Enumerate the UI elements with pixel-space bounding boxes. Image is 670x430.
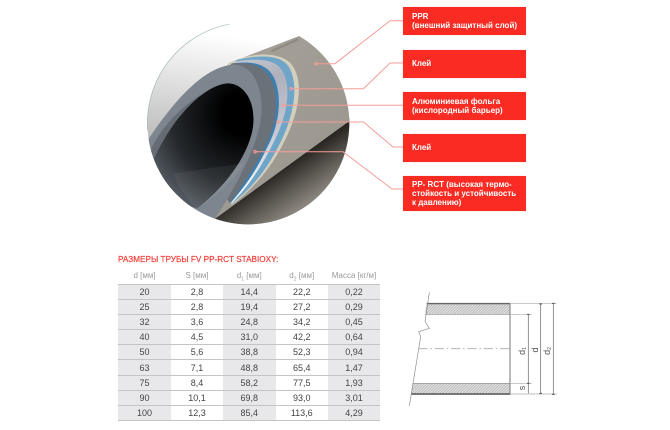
inner face shade (148, 95, 200, 160)
label: aluminium foil (403, 92, 526, 120)
inner bore (150, 83, 253, 208)
label: PP-RCT: PP- RCT (высокая термо- (412, 180, 512, 188)
dimensions table: 50 (139, 347, 150, 357)
dimensions table: 65,4 (293, 363, 311, 373)
dimensions table: 0,29 (345, 302, 363, 312)
dimensions table: 38,8 (240, 347, 258, 357)
dimensions table: 69,8 (240, 393, 258, 403)
label: aluminium foil: Алюминиевая фольга (412, 96, 500, 106)
dimensions table: 12,3 (188, 408, 206, 418)
dimensions table: 27,2 (293, 302, 311, 312)
dimensions table: 8,4 (191, 378, 203, 388)
dimensions table: 5,6 (191, 347, 203, 357)
dimensions table: 3,01 (345, 393, 363, 403)
dimensions table: 0,22 (345, 287, 363, 297)
dimensions table: 1,93 (345, 378, 363, 388)
dimensions table: 24,8 (240, 317, 258, 327)
label: PPR (403, 7, 526, 35)
dimensions table: 48,8 (240, 363, 258, 373)
dimension labels: d (517, 350, 527, 355)
dimensions table: 52,3 (293, 347, 311, 357)
label: PPR: (внешний защитный слой) (412, 21, 517, 30)
pipe cutaway illustration (146, 20, 403, 224)
label: PP-RCT: к давлению) (412, 198, 461, 206)
dimension labels: 1 (522, 347, 528, 350)
dimensions table: 31,0 (240, 332, 258, 342)
dimensions table: 90 (139, 393, 150, 403)
dimensions table: 19,4 (240, 302, 258, 312)
dimensions table: 1,47 (345, 363, 363, 373)
dimensions table: 93,0 (293, 393, 311, 403)
dimensions table: 3,6 (191, 317, 203, 327)
label: PP-RCT (403, 176, 526, 210)
dimension labels: 2 (547, 347, 553, 350)
label: glue 1 (403, 50, 526, 78)
dimensions table: 0,45 (345, 317, 363, 327)
dimensions table (118, 270, 380, 421)
dimension labels: d (530, 347, 540, 353)
table title: РАЗМЕРЫ ТРУБЫ FV PP-RCT STABIOXY: (118, 255, 278, 264)
dimensions table: 4,29 (345, 408, 363, 418)
leader: glue 2 (277, 121, 403, 147)
layer: aluminium foil (230, 60, 288, 204)
dimensions table: d2 [мм] (289, 270, 314, 282)
label: glue 1: Клей (412, 59, 431, 68)
leader lines (254, 21, 403, 189)
dimensions table: 85,4 (240, 408, 258, 418)
dimensions table: d1 [мм] (237, 270, 262, 282)
dimensions table: Масса [кг/м] (332, 270, 376, 280)
dimension labels: d (542, 350, 552, 355)
dimensions table: 34,2 (293, 317, 311, 327)
leader: PPR (315, 21, 403, 65)
pipe shadow (215, 118, 350, 224)
dimensions table: 42,2 (293, 332, 311, 342)
layer: cream outer edge (227, 54, 299, 205)
dimensions table: S [мм] (185, 270, 208, 280)
dimensions table: 20 (139, 287, 150, 297)
dimension labels: s (517, 385, 527, 390)
dimensions table: 14,4 (240, 287, 258, 297)
dimensions table: 2,8 (191, 302, 203, 312)
dimensions table: 32 (139, 317, 150, 327)
dimensions table: 7,1 (191, 363, 203, 373)
label: glue 2 (403, 134, 526, 162)
dimensions table: 0,94 (345, 347, 363, 357)
dimensions table: 2,8 (191, 287, 203, 297)
label: PP-RCT: стойкость и устойчивость (412, 188, 516, 198)
leader: glue 1 (290, 63, 403, 90)
label: aluminium foil: (кислородный барьер) (412, 106, 503, 114)
label: PPR: PPR (412, 12, 428, 21)
dimensions table: d [мм] (133, 270, 156, 280)
layer: outer glue (230, 56, 294, 204)
dimension labels (517, 347, 553, 390)
pipe outer body (212, 36, 350, 219)
dimensions table: 75 (139, 378, 150, 388)
dimensions table: 40 (139, 332, 150, 342)
layer: inner glue (230, 62, 279, 202)
label: glue 2: Клей (412, 143, 431, 152)
dimensions table: 10,1 (188, 393, 206, 403)
dimensions table: 77,5 (293, 378, 311, 388)
dimensions table: 22,2 (293, 287, 311, 297)
dimensions table: 25 (139, 302, 150, 312)
layer: PP-RCT dark edge (227, 63, 276, 204)
dimensions table: 113,6 (291, 408, 313, 418)
dimensions table: 100 (137, 408, 152, 418)
dimensions table: 4,5 (191, 332, 203, 342)
dimensions table: 63 (139, 363, 150, 373)
dimensions table: 0,64 (345, 332, 363, 342)
leader: foil (282, 104, 403, 107)
leader: PP-RCT (254, 150, 403, 189)
layer: PP-RCT face (147, 65, 262, 219)
dimensions table: 58,2 (240, 378, 258, 388)
